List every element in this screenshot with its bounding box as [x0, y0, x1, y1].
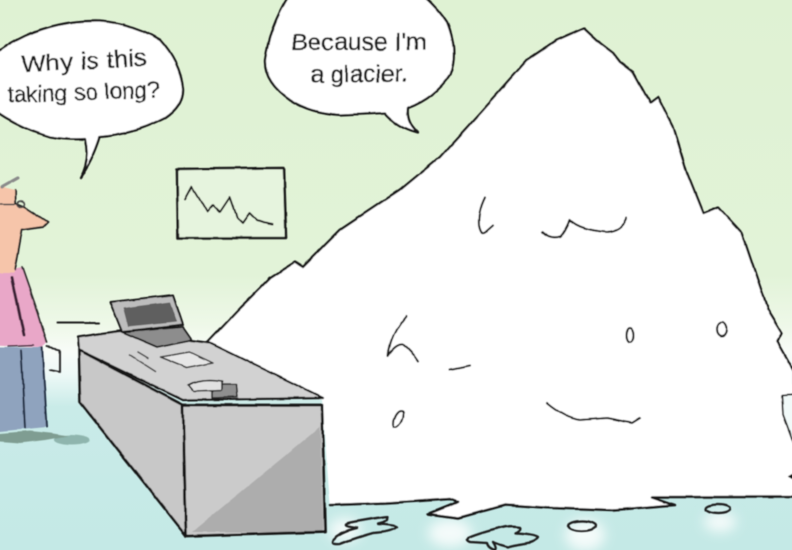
speech bubble: glacier: [265, 0, 454, 133]
desk: [78, 295, 325, 536]
floor highlights: [329, 512, 736, 550]
desk front face: [183, 405, 325, 536]
papers: [160, 352, 213, 368]
meltwater puddles: [332, 504, 730, 550]
speech bubble: manager: [0, 21, 183, 178]
desk top: [78, 331, 323, 400]
stack on desk: [188, 380, 237, 398]
desk side face: [79, 350, 186, 536]
hovering line by desk: [57, 322, 99, 324]
pen marks: [130, 352, 155, 371]
speech bubble: glacier: Because I'm: [291, 29, 427, 56]
trousers: [0, 347, 47, 432]
hair: [2, 178, 18, 187]
shoes: [0, 431, 68, 443]
speech bubble: manager: Why is this: [20, 45, 148, 78]
speech bubble: manager: taking so long?: [6, 76, 160, 108]
glacier: [205, 28, 792, 518]
speech bubble: glacier: a glacier.: [310, 61, 408, 88]
floor shadow: [54, 435, 90, 445]
glasses: [0, 201, 25, 207]
shirt: [0, 267, 47, 347]
wall chart: [177, 168, 286, 238]
glacier surface marks: [388, 198, 727, 429]
man: [0, 178, 90, 445]
laptop: [110, 295, 192, 347]
hand: [47, 347, 60, 372]
figure at right edge: [782, 395, 792, 481]
head: [0, 185, 48, 273]
